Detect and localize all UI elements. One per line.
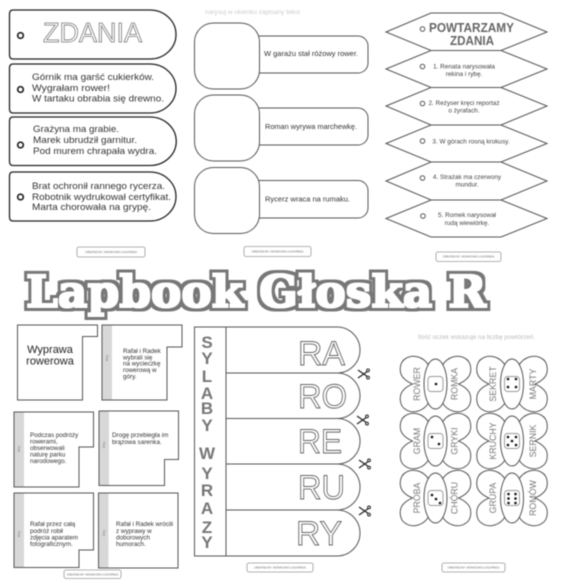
card: story part 1 — [102, 325, 182, 400]
spine: sylaby wyrazy: R — [201, 481, 213, 500]
butterfly: sekret marty, four dots: SEKRET — [488, 366, 498, 402]
tag: sentences three: Brat ochronił rannego rycerza. — [32, 181, 165, 192]
card: story title: Wyprawa — [27, 344, 74, 356]
hexagon: sentence 5: rudą wiewiórkę. — [445, 220, 489, 227]
card: story part 4: klej — [16, 531, 21, 537]
hexagon: sentence 4: mundur. — [455, 182, 479, 188]
footer label: CREATED BY: MONIKOWO-LOGOPEDA — [85, 250, 137, 254]
butterfly: gram gryki, two dots — [400, 413, 471, 469]
spine: sylaby wyrazy: L — [202, 367, 212, 386]
butterfly: grupa romow, six dots: ROMÓW — [528, 479, 538, 516]
flap: RU — [226, 464, 360, 510]
flap: RA: RA — [298, 335, 345, 373]
hexagon: sentence 4 — [386, 162, 547, 200]
card: story part 4: Rafał przez całą — [30, 521, 76, 528]
flap: RA — [226, 327, 360, 373]
flap: RE — [226, 418, 360, 464]
card: story part 4: zdjęcia aparatem — [30, 534, 78, 542]
card: garage sentence: W garażu stał różowy rower. — [264, 49, 358, 58]
butterfly: gram gryki, two dots: GRYKI — [450, 427, 460, 455]
footer label — [442, 563, 505, 572]
card: story part 2 — [14, 412, 94, 487]
footer label: CREATED BY: MONIKOWO-LOGOPEDA — [254, 566, 306, 570]
butterfly: rower romka, one dot — [400, 356, 471, 412]
spine: sylaby wyrazy — [194, 327, 226, 556]
spine: sylaby wyrazy: Y — [201, 533, 213, 552]
butterfly: sekret marty, four dots — [477, 356, 547, 412]
tag: heading zdania — [10, 10, 176, 59]
card: story part 1: Rafał i Radek — [123, 348, 162, 355]
icon: scissors — [359, 506, 370, 516]
tag: sentences two: Marek ubrudził garnitur. — [33, 135, 137, 146]
footer label: CREATED BY: MONIKOWO-LOGOPEDA — [67, 572, 119, 576]
card: story part 3: Drogę przebiegła im — [112, 432, 168, 439]
card: story part 1: wybrali się — [122, 354, 153, 362]
card: story part 1: góry. — [123, 374, 137, 380]
hexagon: sentence 2 — [386, 88, 547, 125]
panel: butterflies — [400, 334, 547, 572]
card: story part 5 — [98, 493, 178, 568]
tag: sentences two: Pod murem chrapała wydra. — [33, 146, 157, 157]
card: garage sentence — [194, 23, 368, 89]
hexagon: sentence 1 — [386, 50, 547, 88]
spine: sylaby wyrazy: Y — [201, 416, 213, 435]
tag: sentences one: Wygrałam rower! — [32, 83, 110, 94]
tag: sentences one: W tartaku obrabia się drewno. — [32, 94, 164, 104]
card: story part 3 — [99, 411, 178, 486]
icon: scissors — [357, 415, 368, 425]
butterfly: gram gryki, two dots: GRAM — [412, 428, 422, 454]
card: story part 5: z wyprawy w — [116, 528, 152, 535]
footer label: CREATED BY: MONIKOWO-LOGOPEDA — [443, 254, 495, 258]
hexagon: sentence 3: 3. W górach rosną krokusy. — [432, 138, 510, 146]
caption: Ilość oczek wskazuje na liczbę powtórzeń. — [418, 334, 535, 341]
butterfly: proba choru, three dots: PRÓBA — [412, 482, 422, 513]
card: carrot sentence: Roman wyrywa marchewkę. — [265, 122, 357, 131]
tag: sentences one — [10, 64, 176, 113]
butterfly: proba choru, three dots: CHÓRU — [450, 482, 460, 514]
butterfly: proba choru, three dots — [400, 470, 471, 526]
card: story part 3: klej — [101, 442, 106, 448]
hexagon: sentence 2: o żyrafach. — [448, 108, 480, 114]
flap: RY — [226, 510, 360, 556]
butterfly: rower romka, one dot: ROMKA — [450, 368, 460, 400]
card: knight sentence: Rycerz wraca na rumaku. — [265, 194, 350, 204]
card: story part 5: Rafał i Radek wrócili — [116, 521, 173, 528]
spine: sylaby wyrazy: S — [201, 333, 213, 352]
card: story title: rowerowa — [26, 356, 75, 368]
flap: RE: RE — [298, 423, 342, 461]
spine: sylaby wyrazy: Z — [202, 518, 212, 537]
spine: sylaby wyrazy: B — [201, 399, 213, 418]
flap: RY: RY — [296, 515, 342, 553]
butterfly: rower romka, one dot: ROWER — [412, 367, 422, 401]
tag: sentences three: Marta chorowała na grypę. — [32, 202, 151, 213]
flap: RO — [226, 373, 360, 418]
spine: sylaby wyrazy: Y — [201, 349, 213, 368]
spine: sylaby wyrazy: Y — [201, 464, 213, 483]
card: story part 3: brązowa sarenka. — [112, 439, 162, 446]
card: story part 4: podróż robił — [30, 528, 64, 535]
footer label — [244, 246, 311, 256]
card: story part 1: na wycieczkę — [123, 360, 161, 368]
card: story part 2: Podczas podróży — [30, 432, 79, 439]
title: Lapbook Głoska R — [26, 267, 486, 318]
spine: sylaby wyrazy: W — [199, 444, 216, 463]
footer label: CREATED BY: MONIKOWO-LOGOPEDA — [252, 250, 304, 254]
hexagon: sentence 4: 4. Strażak ma czerwony — [433, 174, 502, 181]
tag: heading zdania: ZDANIA — [43, 17, 142, 48]
tag: sentences three — [10, 172, 176, 221]
footer label — [436, 252, 501, 262]
tag: sentences one: Górnik ma garść cukierków. — [32, 72, 154, 83]
card: story part 1: klej — [104, 355, 109, 361]
hexagon: sentence 2: 2. Reżyser kręci reportaż — [428, 100, 500, 107]
flap: RO: RO — [298, 378, 347, 416]
butterfly: sekret marty, four dots: MARTY — [528, 369, 538, 399]
card: story part 2: obserwowali — [30, 445, 65, 452]
footer label — [64, 570, 121, 578]
card: story part 5: doborowych — [116, 534, 150, 542]
spine: sylaby wyrazy: A — [201, 499, 213, 518]
panel: draw and read — [194, 9, 368, 256]
butterfly: grupa romow, six dots: GRUPA — [488, 483, 498, 513]
footer label: CREATED BY: MONIKOWO-LOGOPEDA — [448, 566, 500, 570]
hexagon: sentence 5 — [386, 200, 547, 237]
hexagon: heading — [386, 13, 547, 50]
footer label — [247, 563, 313, 572]
spine: sylaby wyrazy: A — [201, 384, 213, 403]
hexagon: sentence 1: 1. Renata narysowała — [433, 64, 495, 70]
panel: repeat sentences hexagons — [386, 13, 547, 262]
caption: narysuj w okienku zapisany tekst — [205, 9, 300, 16]
icon: scissors — [359, 459, 370, 469]
card: story part 2: klej — [16, 446, 21, 452]
card: story part 4 — [14, 493, 94, 568]
card: story part 1: rowerową w — [123, 367, 157, 374]
hexagon: sentence 3 — [386, 125, 547, 162]
tag: sentences three: Robotnik wydrukował certyfikat. — [32, 192, 171, 203]
card: story part 2: narodowego. — [30, 458, 67, 465]
card: knight sentence — [194, 168, 368, 234]
card: story part 5: klej — [101, 530, 106, 536]
footer label — [77, 247, 145, 257]
flap: RU: RU — [298, 469, 345, 507]
hexagon: heading: POWTARZAMY — [429, 20, 514, 35]
card: story part 5: humorach. — [116, 541, 146, 548]
butterfly: kruchy sernik, five dots: SERNIK — [528, 424, 538, 457]
tag: sentences two: Grażyna ma grabie. — [33, 124, 119, 135]
card: story part 2: rowerami, — [30, 438, 58, 446]
butterfly: grupa romow, six dots — [477, 470, 547, 526]
panel: zdania tags — [10, 10, 176, 257]
hexagon: sentence 5: 5. Romek narysował — [438, 212, 497, 219]
card: story title — [18, 325, 98, 400]
tag: sentences two — [10, 117, 176, 166]
hexagon: sentence 1: rekina i rybę. — [446, 71, 483, 78]
panel: syllable flaps — [194, 327, 370, 572]
panel: story flap cards — [14, 325, 182, 578]
hexagon: heading: ZDANIA — [450, 33, 495, 48]
card: story part 4: fotograficznym. — [30, 541, 73, 548]
card: story part 2: naturę parku — [30, 452, 66, 458]
butterfly: kruchy sernik, five dots — [477, 413, 547, 469]
icon: scissors — [358, 369, 369, 379]
butterfly: kruchy sernik, five dots: KRUCHY — [488, 422, 498, 460]
card: carrot sentence — [194, 95, 368, 161]
